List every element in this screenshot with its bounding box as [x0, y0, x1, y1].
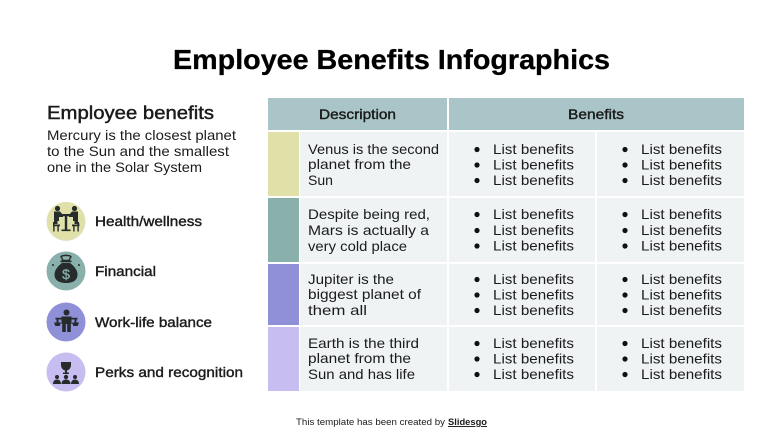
table header: benefits: Benefits	[568, 106, 624, 122]
row 4: List benefits	[641, 350, 722, 366]
row 3: Jupiter is the	[308, 271, 394, 287]
row 1: List benefits	[641, 156, 722, 172]
row 1: Venus is the second	[308, 141, 439, 157]
intro paragraph: to the Sun and the smallest	[47, 143, 229, 159]
row 2	[268, 198, 744, 262]
row 2: List benefits	[641, 238, 722, 254]
row 3: them all	[308, 302, 367, 318]
row 3: List benefits	[641, 271, 722, 287]
row 1: Sun	[308, 172, 333, 188]
row 1: planet from the	[308, 156, 411, 172]
table header: benefits	[449, 98, 744, 130]
row 2: List benefits	[493, 222, 574, 238]
row 1: List benefits	[493, 141, 574, 157]
row 2: List benefits	[641, 222, 722, 238]
row 1: List benefits	[493, 172, 574, 188]
row 4	[268, 327, 744, 391]
row 4: Earth is the third	[308, 335, 419, 351]
row 1: List benefits	[641, 172, 722, 188]
row 2: Despite being red,	[308, 206, 430, 222]
row 1: List benefits	[641, 141, 722, 157]
legend item: financial: $	[62, 266, 70, 282]
row 4: List benefits	[641, 335, 722, 351]
row 4: List benefits	[493, 335, 574, 351]
panel: legend	[46, 202, 243, 392]
row 2: List benefits	[493, 238, 574, 254]
legend item: health/wellness	[46, 202, 202, 241]
row 3: List benefits	[641, 302, 722, 318]
legend item: perks and recognition	[46, 352, 243, 392]
title: Employee Benefits Infographics	[173, 44, 610, 75]
row 3: List benefits	[493, 286, 574, 302]
footer credit: This template has been created by	[296, 417, 445, 428]
row 2: List benefits	[641, 206, 722, 222]
row 4: List benefits	[493, 366, 574, 382]
intro paragraph	[47, 127, 236, 175]
row 2: very cold place	[308, 238, 407, 254]
legend item: work-life balance	[46, 302, 212, 342]
row 4: List benefits	[493, 350, 574, 366]
row 3: List benefits	[641, 286, 722, 302]
row 3: List benefits	[493, 271, 574, 287]
row 4: List benefits	[641, 366, 722, 382]
legend item: financial: Financial	[95, 263, 156, 279]
row 2: Mars is actually a	[308, 222, 429, 238]
row 2: List benefits	[493, 206, 574, 222]
row 3: List benefits	[493, 302, 574, 318]
intro paragraph: Mercury is the closest planet	[47, 127, 236, 143]
intro paragraph: one in the Solar System	[47, 159, 202, 175]
row 3: biggest planet of	[308, 286, 421, 302]
table header: description: Description	[319, 106, 396, 122]
row 3	[268, 264, 744, 325]
row 1	[268, 132, 744, 196]
row 1: List benefits	[493, 156, 574, 172]
legend item: perks and recognition: Perks and recognition	[95, 364, 243, 380]
table	[268, 98, 744, 391]
panel: intro text	[47, 103, 236, 175]
legend item: work-life balance: Work-life balance	[95, 314, 212, 330]
intro heading: Employee benefits	[47, 103, 214, 123]
table header: description	[268, 98, 447, 130]
footer credit: Slidesgo	[448, 417, 487, 428]
legend item: health/wellness: Health/wellness	[95, 213, 202, 229]
legend item: financial	[46, 252, 156, 290]
row 4: Sun and has life	[308, 366, 415, 382]
row 4: planet from the	[308, 350, 411, 366]
